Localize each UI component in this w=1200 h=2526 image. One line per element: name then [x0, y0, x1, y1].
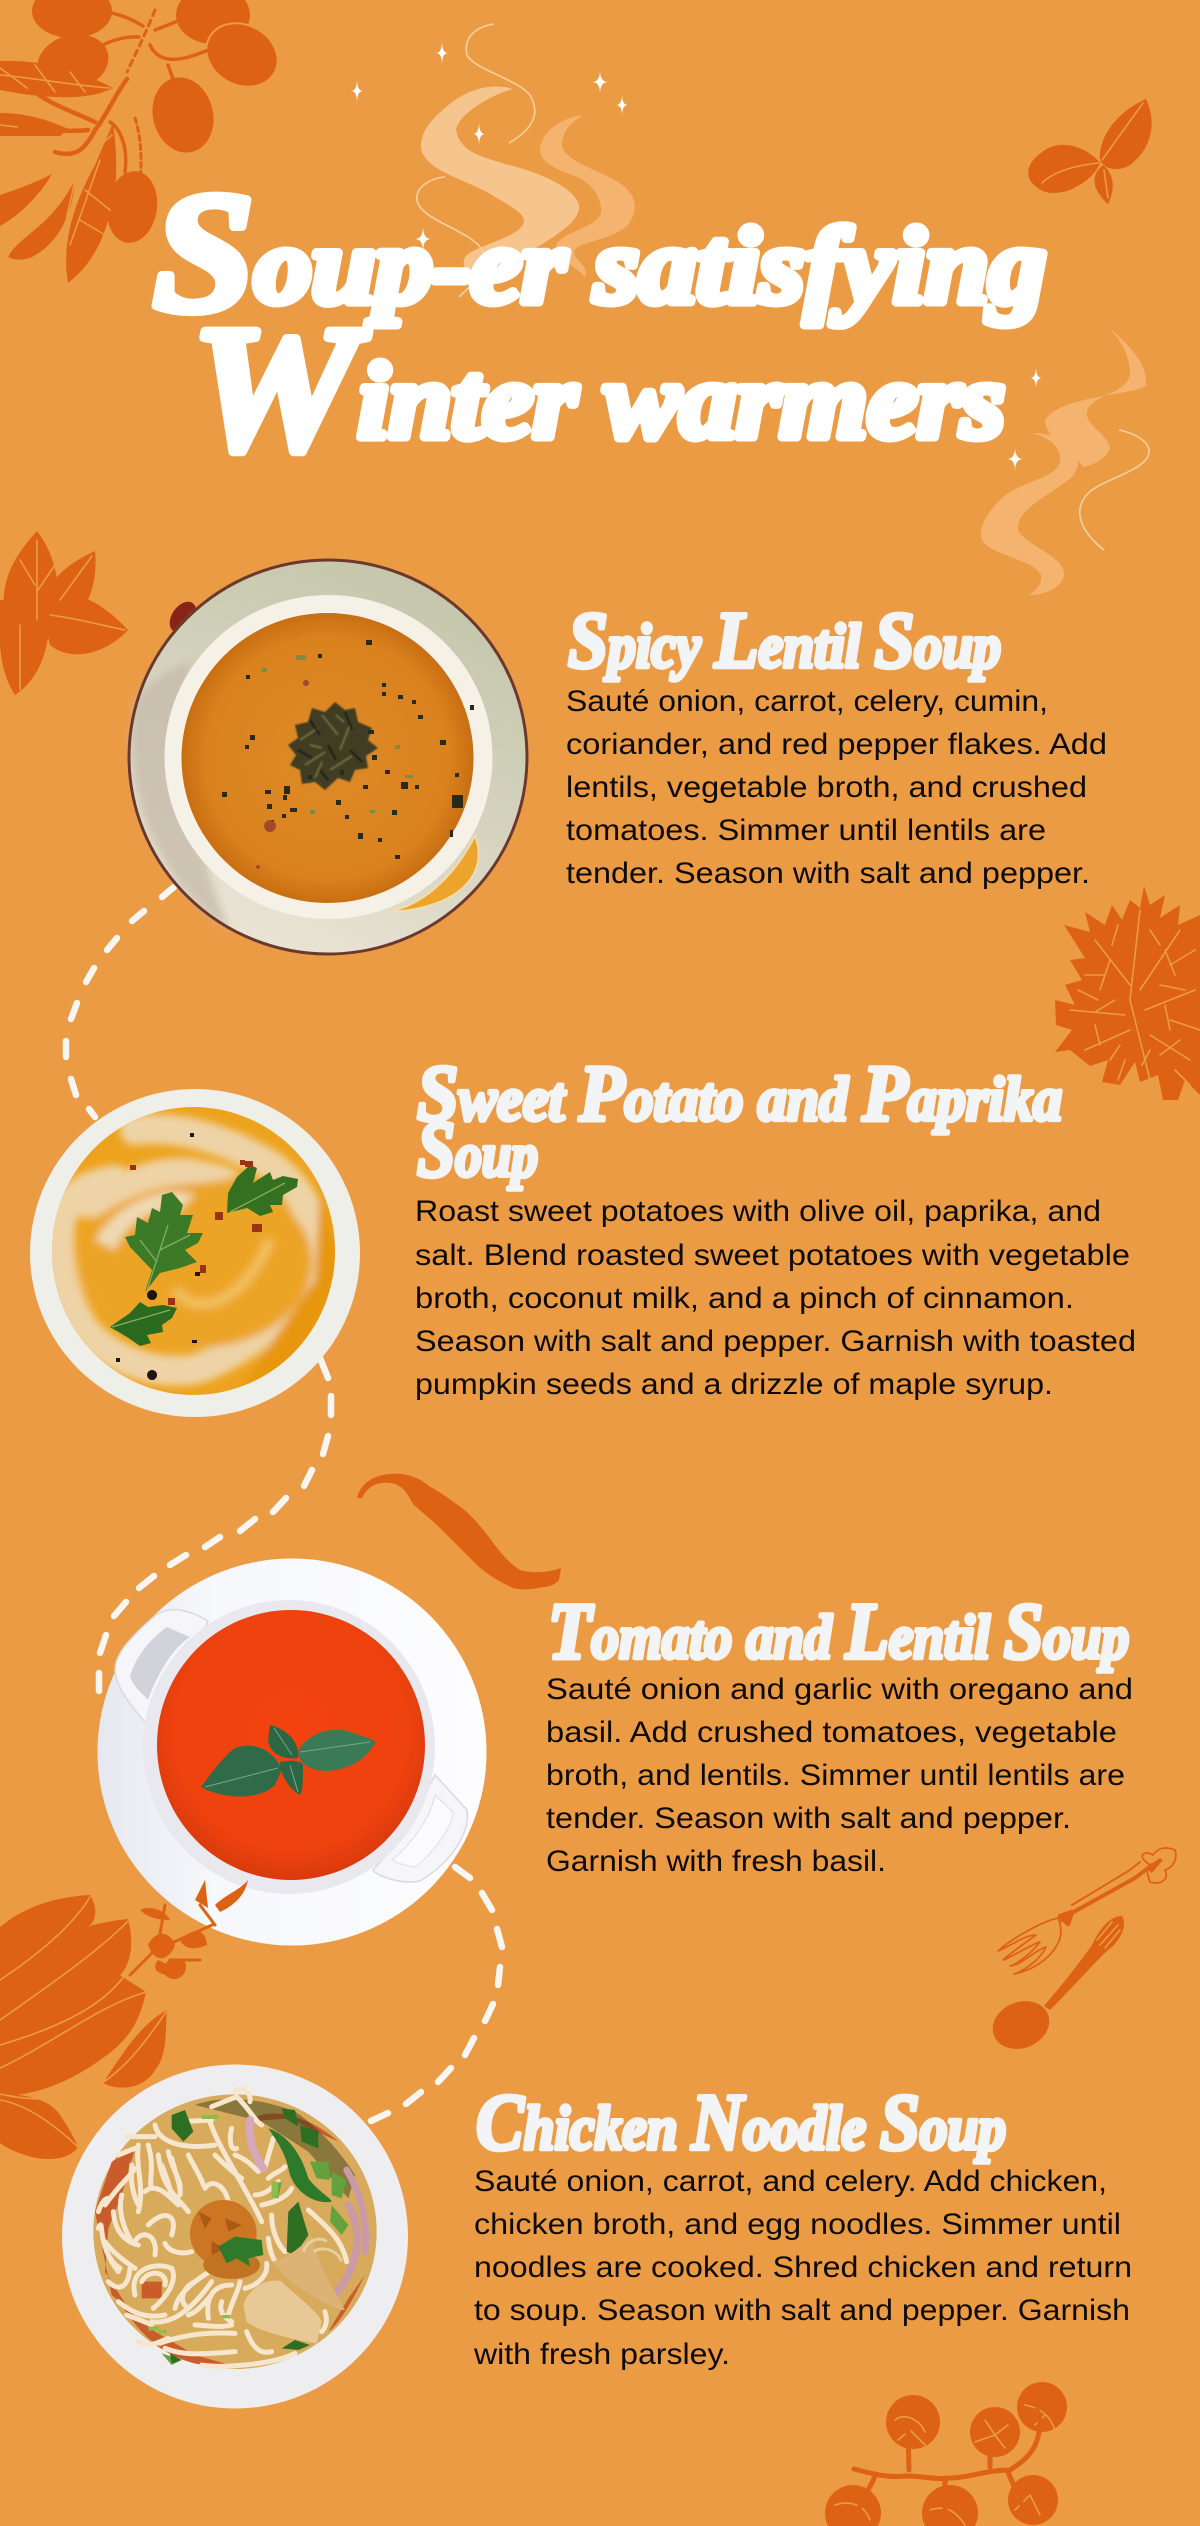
botanical: fork and spoon	[985, 1848, 1176, 2057]
text: tomato recipe: Garnish with fresh basil.	[546, 1845, 886, 1878]
text: sweet potato recipe: pumpkin seeds and a drizzle of maple syrup.	[415, 1368, 1053, 1401]
handles	[115, 1610, 467, 1882]
section: sweet potato and paprika soup	[415, 1050, 1136, 1401]
photo: spicy lentil soup bowl	[128, 558, 528, 956]
text: tomato recipe: tender. Season with salt and pepper.	[546, 1802, 1071, 1835]
photo: chicken noodle soup bowl	[62, 2064, 408, 2408]
text: sweet potato recipe: Season with salt and pepper. Garnish with toasted	[415, 1325, 1136, 1358]
heading: sweet potato and paprika soup	[417, 1050, 1062, 1194]
botanical: mid-left leaf cluster	[0, 531, 128, 695]
text: tomato recipe	[546, 1673, 1133, 1878]
text: chicken noodle recipe: with fresh parsley.	[473, 2338, 730, 2371]
text: sweet potato recipe	[415, 1195, 1136, 1401]
steam: right	[981, 326, 1149, 595]
text: sweet potato recipe: broth, coconut milk, and a pinch of cinnamon.	[415, 1282, 1074, 1315]
heading: chicken noodle soup: Chicken Noodle Soup	[476, 2079, 1006, 2167]
text: spicy lentil soup recipe: tomatoes. Simmer until lentils are	[566, 814, 1046, 847]
text: chicken noodle recipe: Sauté onion, carrot, and celery. Add chicken,	[474, 2165, 1107, 2198]
text: spicy lentil soup recipe: coriander, and red pepper flakes. Add	[566, 728, 1107, 761]
text: sweet potato recipe: salt. Blend roasted sweet potatoes with vegetable	[415, 1239, 1130, 1272]
dashed connector: bowl 2 to bowl 3	[99, 1358, 331, 1691]
text: spicy lentil soup recipe: Sauté onion, carrot, celery, cumin,	[566, 685, 1048, 718]
dashed connector: bowl 1 to bowl 2	[66, 887, 174, 1117]
text: chicken noodle recipe: chicken broth, and egg noodles. Simmer until	[474, 2208, 1121, 2241]
text: chicken noodle recipe	[473, 2165, 1132, 2371]
title: W	[191, 289, 369, 488]
photo: sweet potato and paprika soup bowl	[30, 1089, 360, 1417]
soup contents	[93, 2089, 377, 2369]
botanical: bottom-left leaves and sprig	[0, 1880, 248, 2159]
title: inter warmers	[358, 342, 1005, 461]
text: tomato recipe: broth, and lentils. Simmer until lentils are	[546, 1759, 1125, 1792]
text: tomato recipe: Sauté onion and garlic with oregano and	[546, 1673, 1133, 1706]
text: spicy lentil soup recipe	[566, 685, 1107, 890]
botanical: chili pepper	[357, 1474, 561, 1589]
herb garnish	[288, 702, 378, 790]
text: sweet potato recipe: Roast sweet potatoes with olive oil, paprika, and	[415, 1195, 1101, 1228]
section: tomato and lentil soup	[546, 1588, 1133, 1878]
heading: tomato and lentil soup: Tomato and Lentil Soup	[548, 1588, 1129, 1676]
section: spicy lentil soup	[566, 597, 1107, 890]
title	[153, 158, 1046, 488]
text: spicy lentil soup recipe: tender. Season with salt and pepper.	[566, 857, 1090, 890]
steam: top centre	[417, 24, 635, 297]
text: chicken noodle recipe: noodles are cooked. Shred chicken and return	[474, 2251, 1132, 2284]
sparkles	[351, 41, 1042, 471]
section: chicken noodle soup	[473, 2079, 1132, 2371]
botanical: top-left cherries and leaves	[0, 0, 289, 283]
botanical: top-right leaves	[1028, 99, 1152, 204]
botanical: bottom-right tomato vine	[825, 2382, 1067, 2526]
photo: tomato and lentil soup bowl	[98, 1558, 486, 1946]
title: S	[153, 158, 254, 348]
basil garnish	[201, 1725, 376, 1797]
heading: sweet potato and paprika soup: Sweet Potato and Paprika	[417, 1050, 1062, 1138]
botanical: right parsley	[1055, 886, 1200, 1100]
heading: sweet potato and paprika soup: Soup	[417, 1106, 538, 1194]
text: spicy lentil soup recipe: lentils, vegetable broth, and crushed	[566, 771, 1087, 804]
text: tomato recipe: basil. Add crushed tomatoes, vegetable	[546, 1716, 1117, 1749]
dashed connector: bowl 3 to bowl 4	[371, 1867, 502, 2121]
title: oup-er satisfying	[254, 207, 1046, 326]
text: chicken noodle recipe: to soup. Season with salt and pepper. Garnish	[474, 2294, 1130, 2327]
heading: spicy lentil soup: Spicy Lentil Soup	[568, 597, 1001, 685]
